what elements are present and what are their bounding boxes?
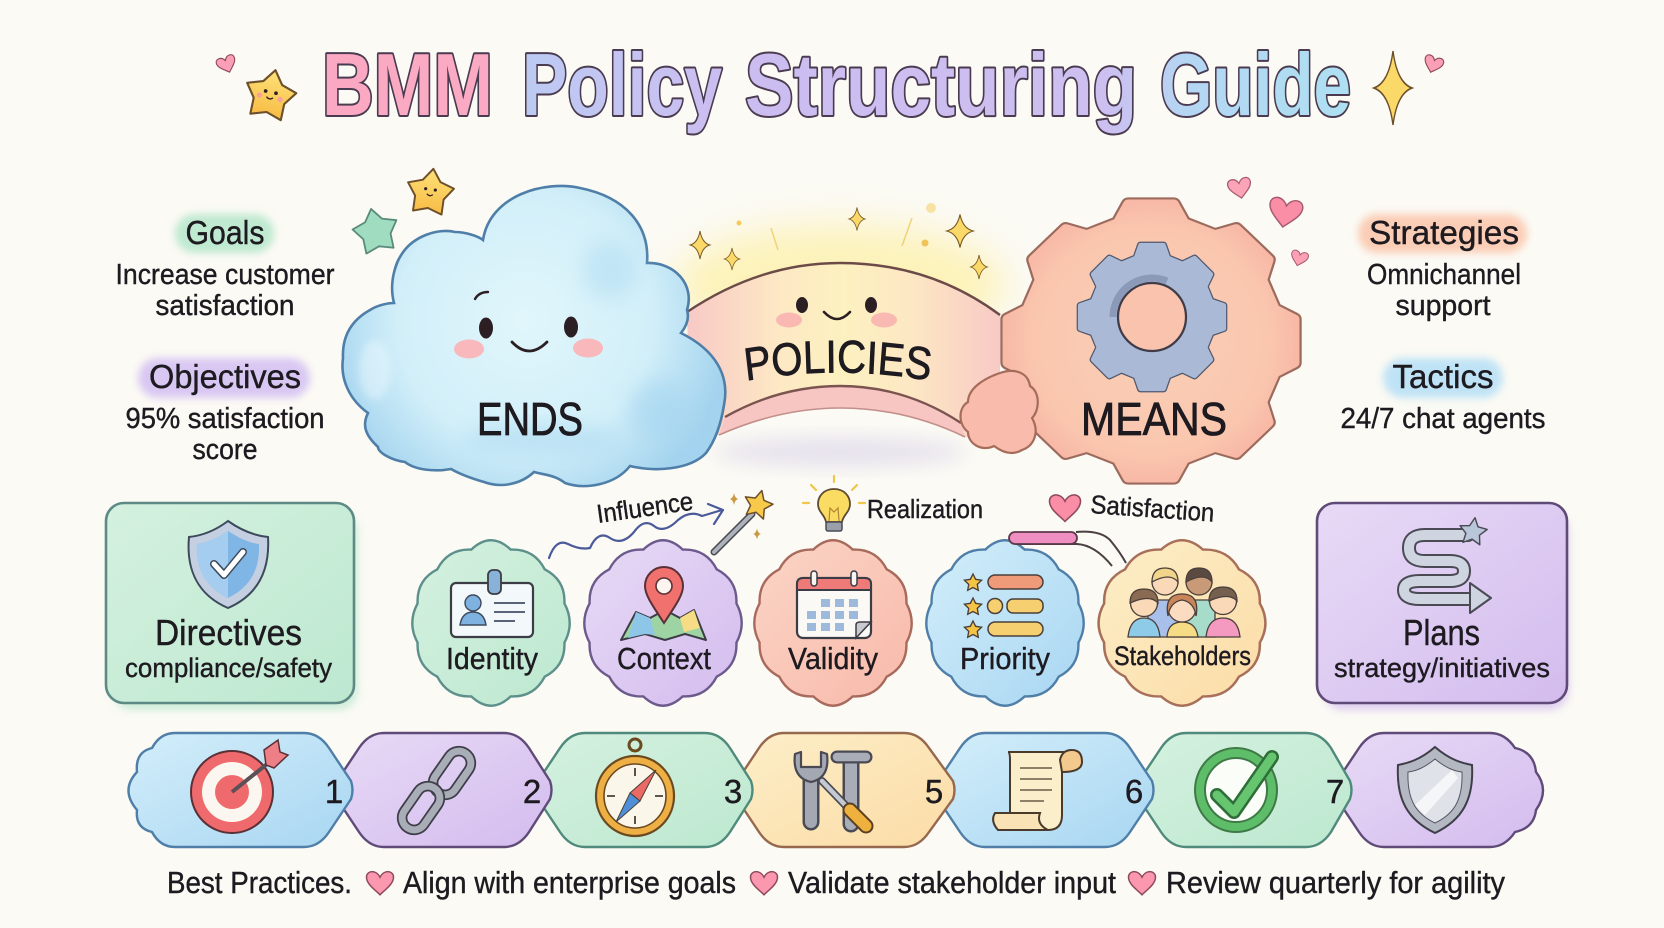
icon: shield check <box>189 521 268 608</box>
inner gear <box>1080 245 1224 389</box>
step 3 <box>536 733 752 847</box>
best practices line <box>167 865 1505 900</box>
policies bridge <box>687 262 1001 438</box>
directives subtitle: compliance/safety <box>125 653 332 683</box>
badge: identity <box>412 540 570 706</box>
panel: goals and objectives text: Objectives <box>149 358 301 395</box>
chain: best practice steps <box>128 733 1543 847</box>
policies label <box>745 340 931 381</box>
arrow: influence squiggle <box>549 504 723 558</box>
small pink puff <box>960 371 1038 453</box>
panel: strategies and tactics text: Strategies <box>1369 214 1519 251</box>
icon: group of people <box>1128 568 1240 637</box>
panel: goals and objectives text: score <box>192 434 258 466</box>
context label: Context <box>617 641 711 676</box>
title <box>322 35 1351 134</box>
step 7 <box>1336 733 1543 847</box>
best practices line: Align with enterprise goals <box>403 865 736 900</box>
cloud face <box>454 292 603 358</box>
icon: title star <box>241 65 300 122</box>
best practices line: Best Practices. <box>167 865 352 900</box>
plans subtitle: strategy/initiatives <box>1334 653 1550 683</box>
icon: silver shield <box>1398 747 1472 833</box>
icon: scroll <box>993 750 1082 830</box>
plans label: Plans <box>1403 612 1480 653</box>
means label: MEANS <box>1081 393 1227 445</box>
panel: goals and objectives text: Increase customer <box>116 259 335 291</box>
panel: strategies and tactics text: Tactics <box>1392 358 1494 395</box>
step 6 <box>1138 733 1352 847</box>
realization label: Realization <box>867 494 983 524</box>
icon: id card <box>451 570 533 637</box>
panel: strategies and tactics text: 24/7 chat agents <box>1340 403 1546 435</box>
means gear <box>960 205 1294 477</box>
icon: satisfaction heart <box>1050 495 1080 521</box>
number 7: 7 <box>1326 773 1344 810</box>
step 4 <box>736 733 954 847</box>
icon: title heart right <box>1422 54 1445 75</box>
title: Guide <box>1160 35 1351 134</box>
policies label: POLICIES <box>745 340 931 381</box>
icon: winding arrow <box>1404 516 1491 613</box>
panel: plans <box>1317 503 1569 710</box>
panel: strategies and tactics text: support <box>1396 290 1490 322</box>
bridge glow and sparkles <box>675 203 1005 466</box>
icon: green star <box>349 204 402 255</box>
directives label: Directives <box>155 612 302 653</box>
icon: heart small top <box>1227 177 1253 200</box>
title: BMM <box>322 35 493 134</box>
panel: strategies and tactics text: Omnichannel <box>1367 259 1521 291</box>
icon: heart 1 <box>366 872 394 895</box>
icon: priority list <box>964 574 1043 637</box>
satisfaction label: Satisfaction <box>1090 489 1215 528</box>
panel: goals and objectives text: Goals <box>186 214 264 251</box>
step 1 <box>128 733 352 847</box>
ends label: ENDS <box>477 393 583 445</box>
badge: priority <box>926 540 1084 706</box>
best practices line: Validate stakeholder input <box>788 865 1116 900</box>
step 5 <box>936 733 1154 847</box>
icon: check ring <box>1200 753 1272 827</box>
connector: priority to stakeholders <box>1009 532 1126 566</box>
icon: magic wand <box>714 487 776 552</box>
best practices line: Review quarterly for agility <box>1166 865 1505 900</box>
priority label: Priority <box>960 641 1050 676</box>
icon: title heart left <box>215 54 239 75</box>
icon: tools <box>795 752 866 826</box>
icon: title sparkle <box>1374 51 1412 125</box>
stakeholders label: Stakeholders <box>1114 641 1251 671</box>
icon: heart 2 <box>750 872 778 895</box>
number 5: 5 <box>925 773 943 810</box>
influence label: Influence <box>595 486 695 529</box>
icon: target <box>191 740 288 833</box>
icon: yellow star <box>404 166 456 216</box>
icon: map pin <box>621 567 706 640</box>
badge: context <box>584 540 742 706</box>
title: Policy <box>522 35 722 134</box>
title: Structuring <box>745 35 1137 134</box>
icon: calendar <box>797 571 871 638</box>
number 1: 1 <box>325 773 343 810</box>
icon: heart 3 <box>1128 872 1156 895</box>
panel: goals and objectives text: 95% satisfaction <box>126 403 324 435</box>
panel: directives <box>106 503 358 710</box>
ends cloud <box>342 186 725 486</box>
badge: validity <box>754 540 912 706</box>
panel: goals and objectives text: satisfaction <box>156 290 294 322</box>
identity label: Identity <box>446 641 538 676</box>
number 6: 6 <box>1125 773 1143 810</box>
number 3: 3 <box>724 773 742 810</box>
icon: heart tiny <box>1289 249 1309 268</box>
validity label: Validity <box>788 641 878 676</box>
number 2: 2 <box>523 773 541 810</box>
icon: heart large <box>1266 196 1304 230</box>
icon: light bulb <box>803 476 865 531</box>
step 2 <box>336 733 552 847</box>
bridge face <box>776 297 897 328</box>
panel: goals and objectives text <box>116 214 335 466</box>
badge: stakeholders <box>1099 540 1265 706</box>
icon: compass <box>596 739 674 836</box>
panel: strategies and tactics text <box>1340 214 1546 435</box>
icon: chain links <box>397 746 476 835</box>
